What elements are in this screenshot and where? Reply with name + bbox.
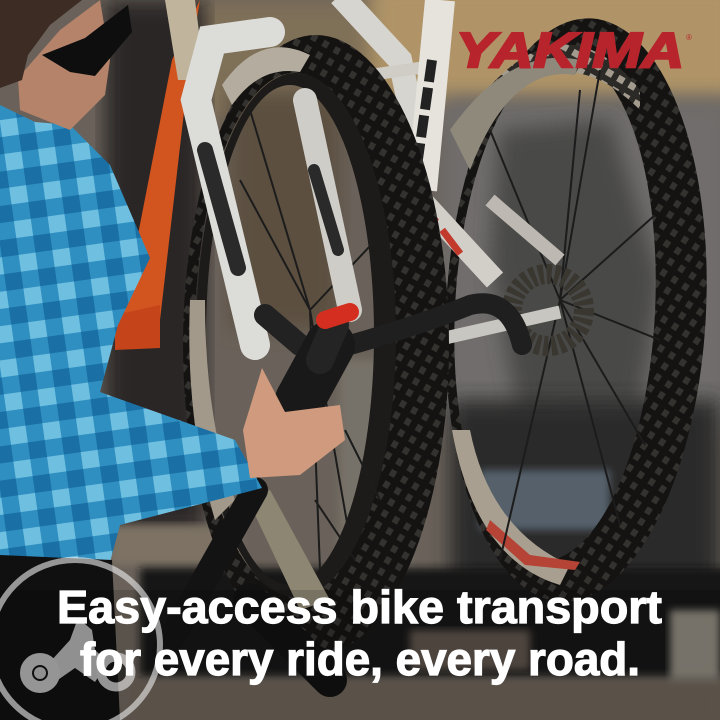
headline: Easy-access bike transport — [57, 581, 662, 633]
headline: for every ride, every road. — [80, 633, 640, 685]
rack arm — [165, 303, 522, 680]
rear wheel — [431, 12, 720, 608]
woman: shirt, head, arm — [0, 0, 345, 720]
front wheel — [183, 35, 449, 655]
headline — [57, 581, 662, 686]
suspension fork — [196, 32, 350, 345]
logo: YAKIMA: ® — [686, 33, 692, 42]
white bike frame — [340, 0, 584, 346]
orange frame tube — [115, 0, 205, 350]
logo: YAKIMA: YAKIMA — [456, 24, 684, 78]
bottom darkening — [0, 590, 720, 720]
